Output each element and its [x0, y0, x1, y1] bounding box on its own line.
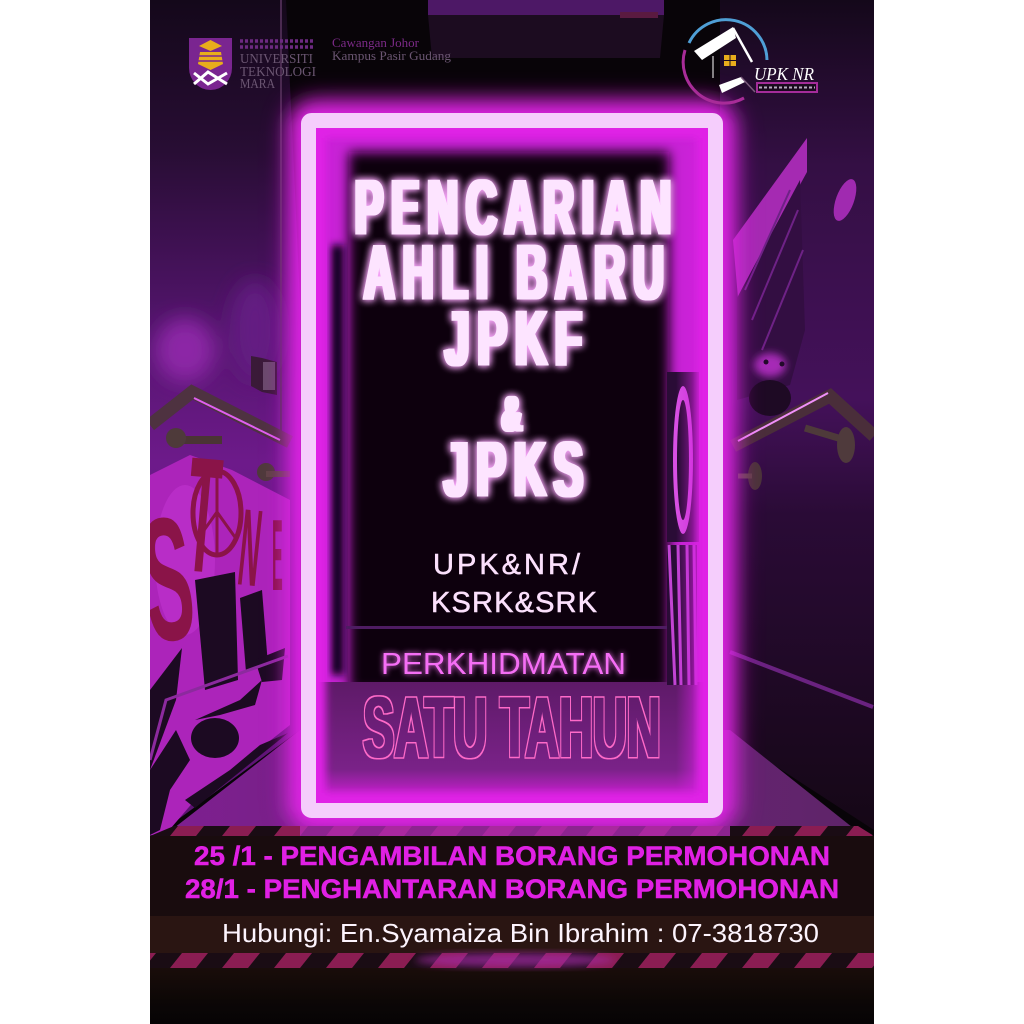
left handrail: [150, 392, 290, 481]
subtitle: units: [433, 552, 598, 612]
title: AHLI BARU: [364, 229, 664, 316]
title: PENCARIAN: [355, 164, 671, 251]
perkhidmatan label: PERKHIDMATAN: [381, 646, 626, 681]
right handrail: [733, 393, 874, 490]
UiTM logo: Kampus Pasir Gudang: [332, 49, 452, 63]
LOVE poster: [667, 372, 699, 685]
dates: 28/1 - PENGHANTARAN BORANG PERMOHONAN: [185, 874, 839, 904]
ceiling unit: [428, 0, 664, 58]
interior floor: [320, 682, 700, 792]
poster: [150, 0, 874, 1024]
left wall: [150, 0, 300, 840]
left wall poster: STONE: S: [133, 480, 202, 680]
UPK NR logo: [683, 20, 818, 103]
inner glow sides: [678, 372, 704, 792]
UiTM logo: MARA: [240, 77, 276, 92]
subtitle: units: KSRK&SRK: [431, 587, 598, 619]
hazard stripes bottom: [150, 953, 874, 968]
title: [355, 164, 671, 513]
left wall poster: STONE: T: [179, 423, 227, 608]
dates: [186, 845, 838, 899]
hazard stripes top: [150, 826, 874, 836]
background photograph: stairwell: [133, 0, 874, 1024]
left wall poster: STONE: [150, 455, 290, 835]
title: &: [502, 385, 522, 442]
interior rail: [346, 626, 672, 629]
light switch: [251, 356, 277, 395]
outer neon glow: [308, 120, 716, 811]
bottom bands: [150, 826, 874, 992]
title: JPKF: [445, 296, 582, 382]
floor: [176, 730, 850, 826]
neon frame: [308, 120, 716, 810]
UiTM logo: TEKNOLOGI: [240, 65, 316, 80]
wall light patches: [155, 280, 280, 382]
lower right rail: [730, 652, 873, 707]
left wall poster: STONE: N: [234, 486, 267, 609]
right wall: [720, 0, 874, 830]
UiTM logo: [189, 36, 452, 92]
subtitle: units: UPK&NR/: [433, 549, 581, 581]
satu tahun outlined text: SATU TAHUN: [363, 679, 661, 776]
left wall poster: STONE: E: [272, 499, 283, 612]
dates: 25 /1 - PENGAMBILAN BORANG PERMOHONAN: [194, 841, 830, 871]
crest: [189, 38, 232, 90]
contact: Hubungi: En.Syamaiza Bin Ibrahim : 07-3818730: [222, 918, 819, 948]
UiTM logo: UNIVERSITI: [240, 52, 313, 67]
UPK NR logo: UPK NR: [754, 64, 814, 84]
right wall mural: [733, 138, 861, 416]
title: JPKS: [444, 427, 583, 513]
panel: inside neon frame: [316, 128, 708, 803]
Jawi script: [240, 41, 313, 47]
UiTM logo: Cawangan Johor: [332, 36, 420, 50]
